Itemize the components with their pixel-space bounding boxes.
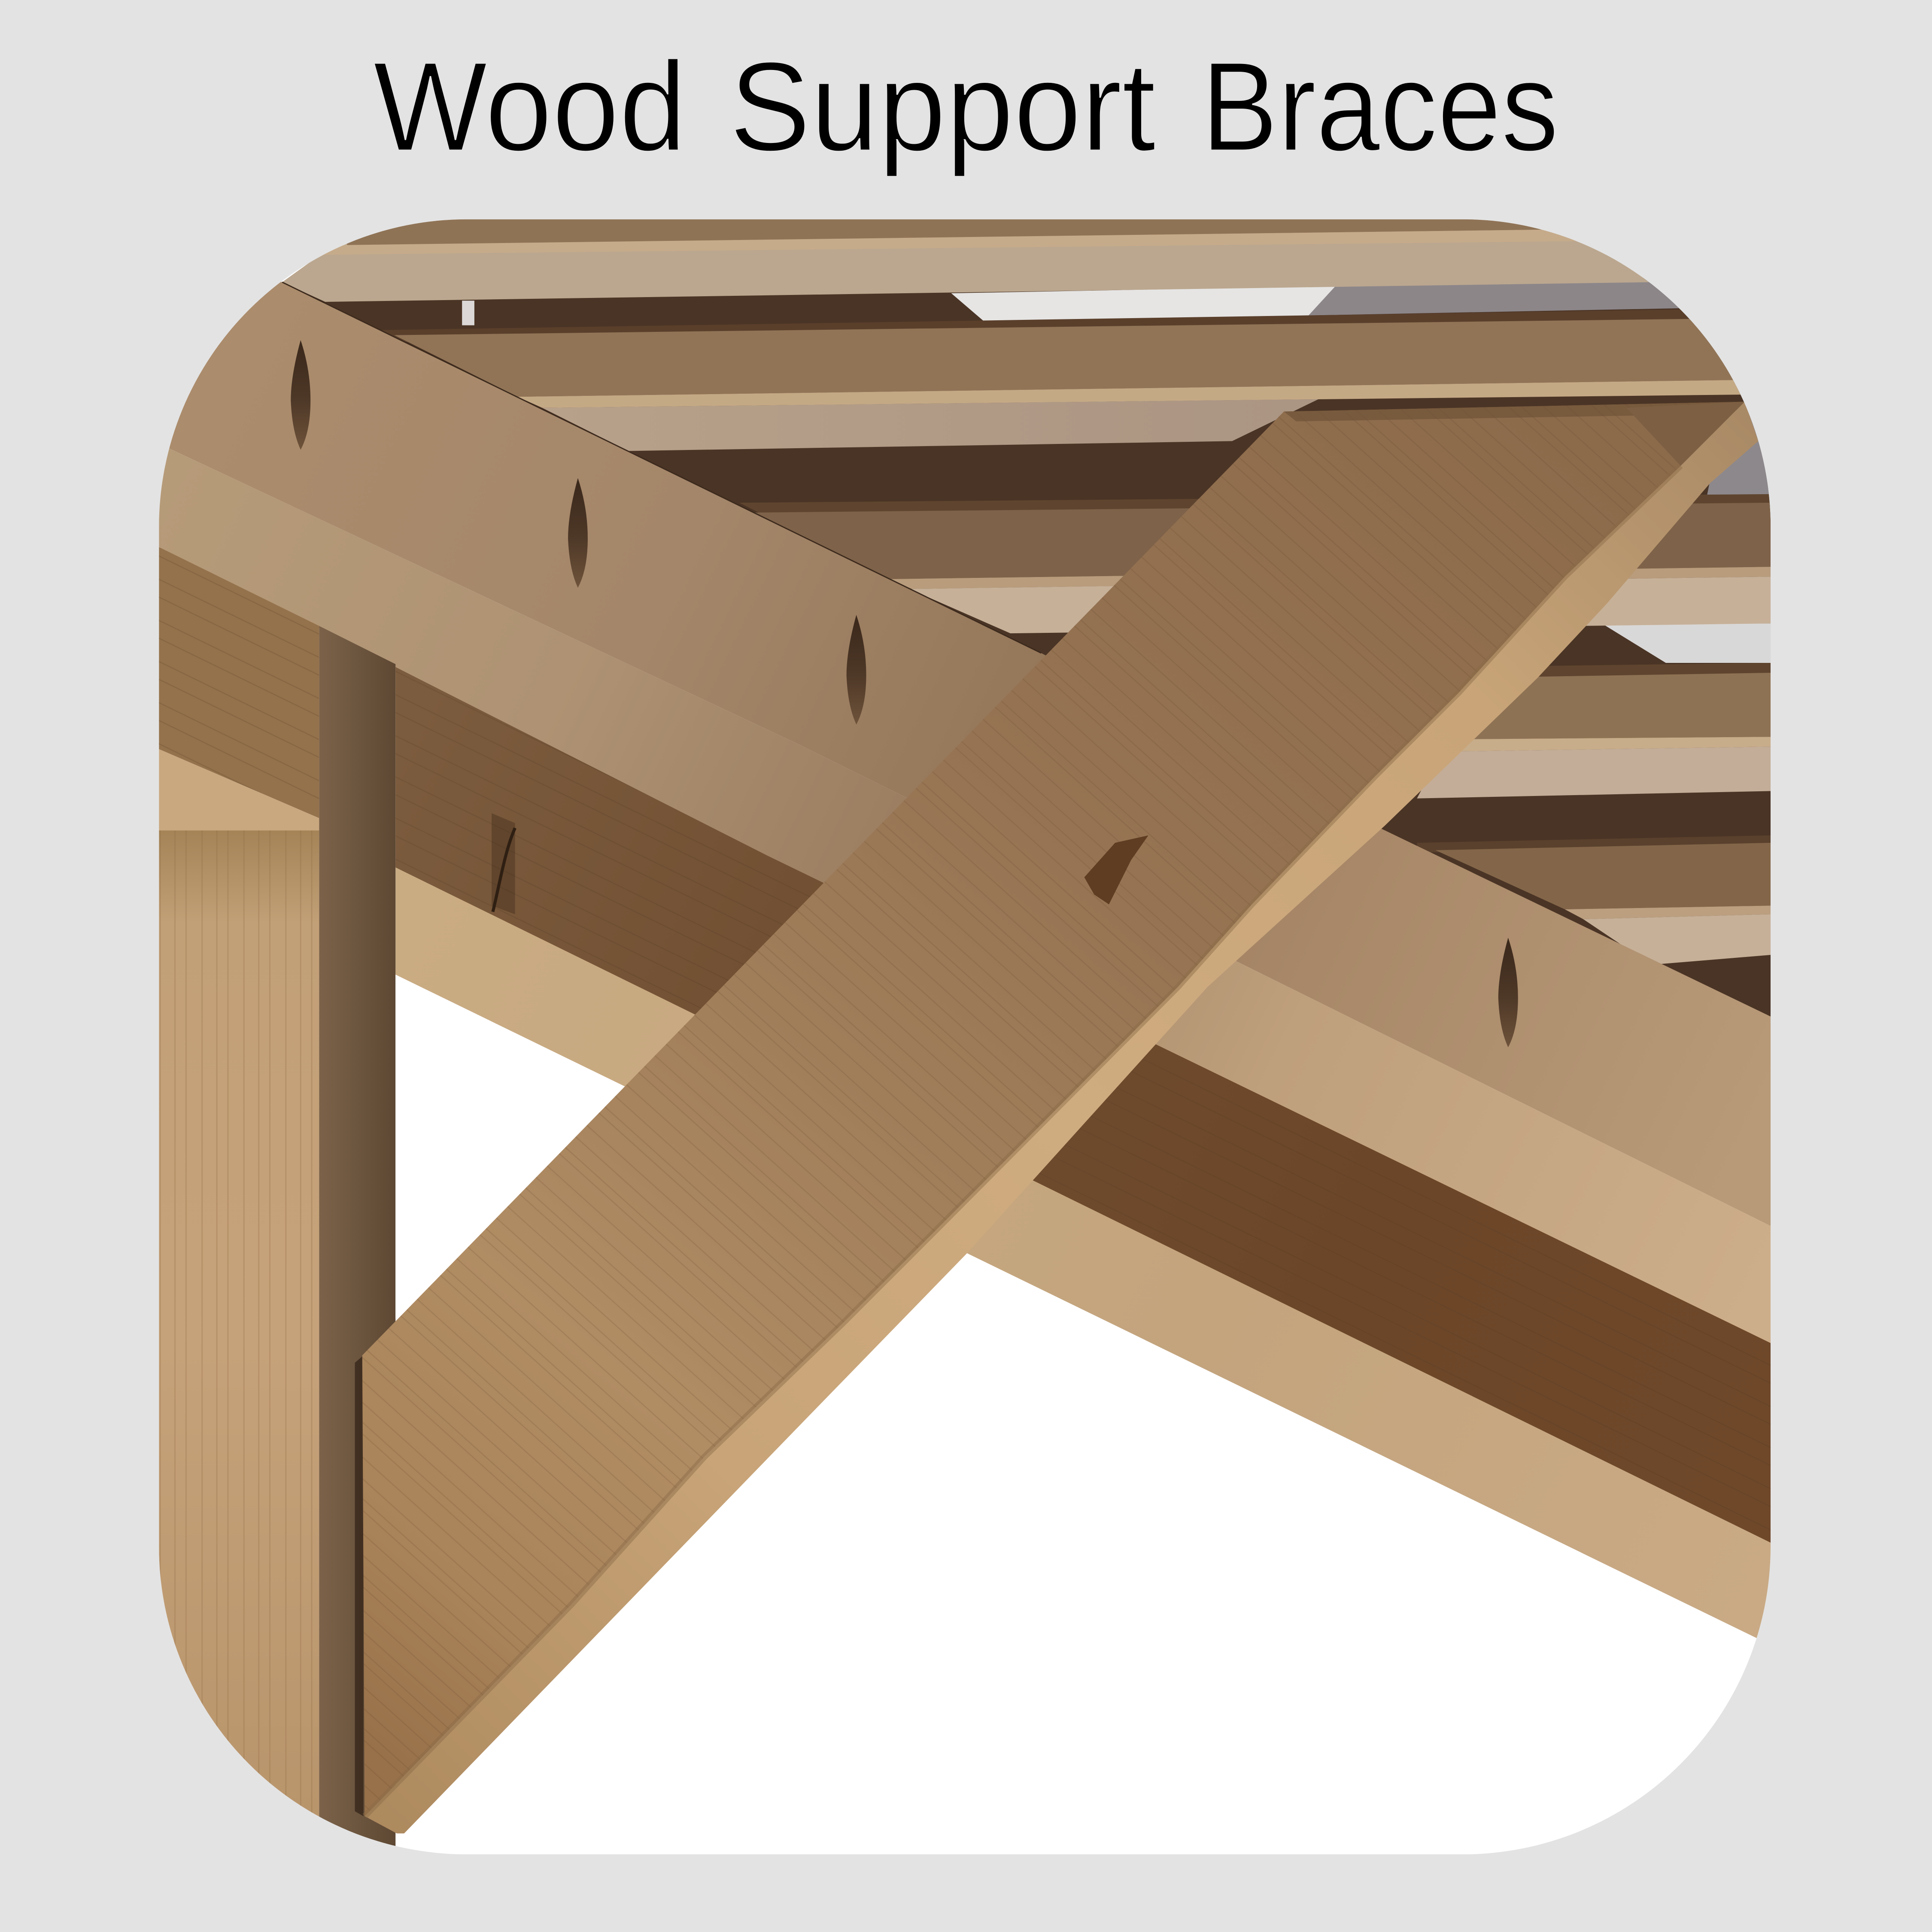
title [374, 35, 1558, 178]
post crack knot [493, 828, 515, 912]
slat 3 [739, 494, 1771, 633]
title: Wood [374, 35, 687, 177]
title: Braces [1201, 35, 1558, 177]
diagonal brace face [362, 402, 1745, 1816]
top slat [282, 219, 1771, 302]
white gap right of post [395, 975, 622, 1318]
post shaded side [319, 626, 395, 1848]
brace joint shading [1626, 402, 1745, 466]
title: Support [729, 35, 1156, 178]
floor glimpse through slats [462, 281, 1771, 663]
brace top bevel [1284, 402, 1745, 422]
peg holes [291, 340, 1518, 1047]
slat 5 [1417, 835, 1771, 965]
main beam top face [159, 223, 1771, 1226]
dark underside behind slats [282, 277, 1771, 1029]
slat 2 [370, 308, 1771, 451]
brace edge strip [365, 402, 1758, 1833]
brace knot [1084, 835, 1148, 905]
main beam side face [159, 444, 1771, 1343]
brace edge bevel [365, 466, 1681, 1816]
lower dark beam [395, 653, 1771, 1543]
slat 4 [1417, 663, 1771, 799]
infographic canvas [159, 59, 1771, 1854]
left post [159, 830, 319, 1854]
upper left block [159, 547, 319, 832]
panel: brace photo [159, 219, 1771, 1854]
beam edge line [282, 282, 1041, 653]
lowest light rail [395, 863, 1771, 1645]
brace shadow on post [355, 1355, 364, 1816]
